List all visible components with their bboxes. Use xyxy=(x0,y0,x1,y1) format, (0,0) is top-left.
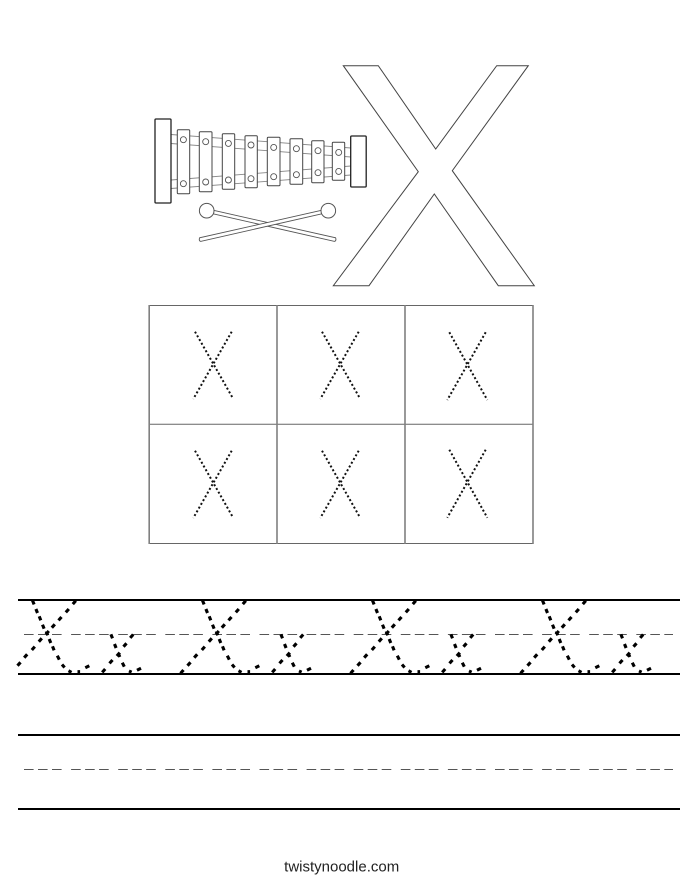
dotted X top right xyxy=(447,332,487,400)
dotted Xx pair 3 xyxy=(350,600,481,673)
dotted X top middle xyxy=(320,332,360,399)
big outline letter X xyxy=(333,66,534,286)
tracing grid of six letter X boxes xyxy=(148,305,534,544)
dotted X bottom middle xyxy=(320,451,360,518)
blank handwriting row xyxy=(18,735,680,809)
footer website text: twistynoodle.com xyxy=(284,858,399,876)
handwriting row with dotted Xx xyxy=(18,600,680,674)
dotted X bottom right xyxy=(447,450,487,518)
dotted X bottom left xyxy=(193,451,233,518)
dotted Xx pair 1 xyxy=(18,600,141,672)
icon: mallets xyxy=(199,203,336,241)
dotted X top left xyxy=(193,332,233,399)
dotted Xx pair 2 xyxy=(180,600,311,673)
dotted Xx pair 4 xyxy=(520,600,651,673)
icon: xylophone xyxy=(155,119,366,203)
